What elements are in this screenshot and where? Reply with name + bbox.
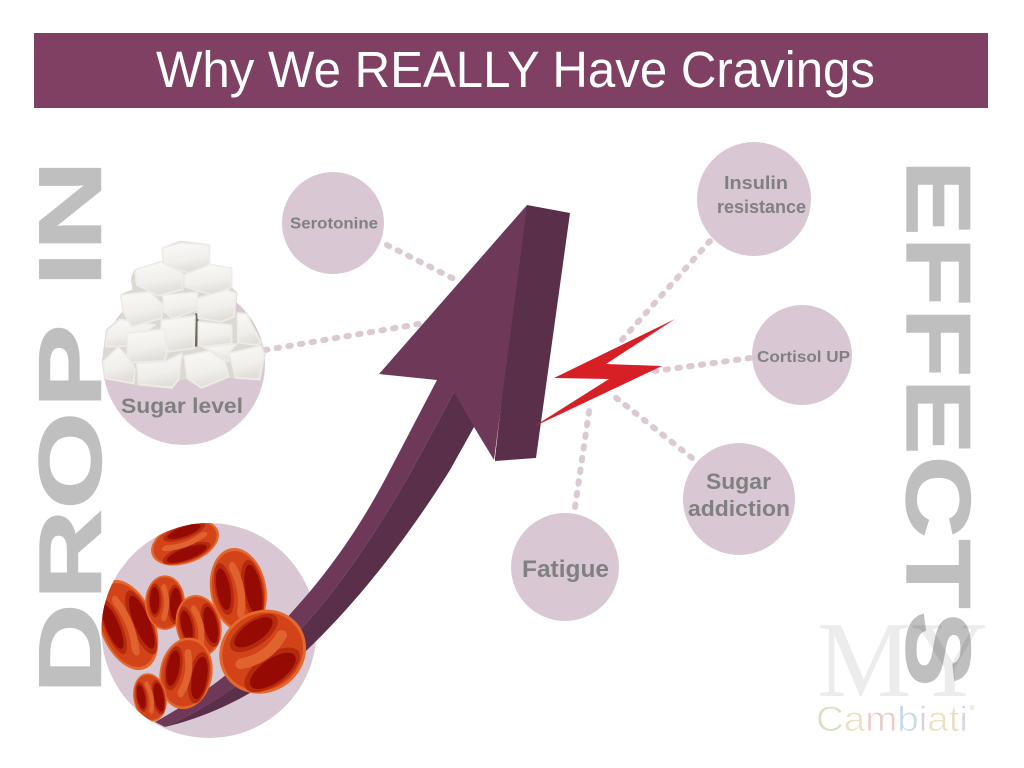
watermark logo: MY: [817, 601, 988, 720]
arrow head side: [495, 205, 570, 461]
rising arrow: [155, 205, 570, 727]
bubble: Insulin resistance: Insulin: [724, 173, 788, 193]
bubble: Sugar level with sugar cubes: Sugar level: [121, 395, 243, 418]
bubble: Sugar level with sugar cubes: [103, 242, 265, 445]
vertical heading: EFFECTS: EFFECTS: [887, 160, 989, 687]
bubble: Cortisol UP: Cortisol UP: [757, 349, 850, 366]
bubble: Cortisol UP: [752, 305, 852, 405]
watermark logo: Cambiati: [816, 700, 968, 739]
bubble: Insulin resistance: resistance: [717, 197, 806, 217]
bubble: Sugar addiction: Sugar: [706, 469, 771, 494]
bubble: Sugar addiction: [683, 443, 795, 555]
lightning bolt: [533, 319, 675, 427]
bubble: Fatigue: Fatigue: [522, 556, 609, 583]
bubble: Fatigue: [511, 513, 619, 621]
title banner: Why We REALLY Have Cravings: [156, 41, 875, 98]
bubble: Insulin resistance: [697, 142, 811, 256]
bubble: Serotonine: [282, 172, 384, 274]
dotted connectors: [265, 241, 750, 507]
bubble: Sugar addiction: addiction: [688, 496, 790, 521]
bubble: blood cells background: [102, 523, 316, 738]
vertical heading: DROP IN: DROP IN: [21, 161, 119, 694]
arrow shaft lit side: [155, 370, 454, 727]
bubble: Serotonine: Serotonine: [290, 216, 378, 232]
watermark logo: ®: [970, 705, 975, 712]
title banner: [34, 33, 988, 108]
arrow head front: [379, 205, 527, 460]
blood cells: [102, 523, 306, 722]
icon: sugar cubes: [103, 242, 265, 388]
arrow shaft shaded side: [165, 385, 482, 727]
